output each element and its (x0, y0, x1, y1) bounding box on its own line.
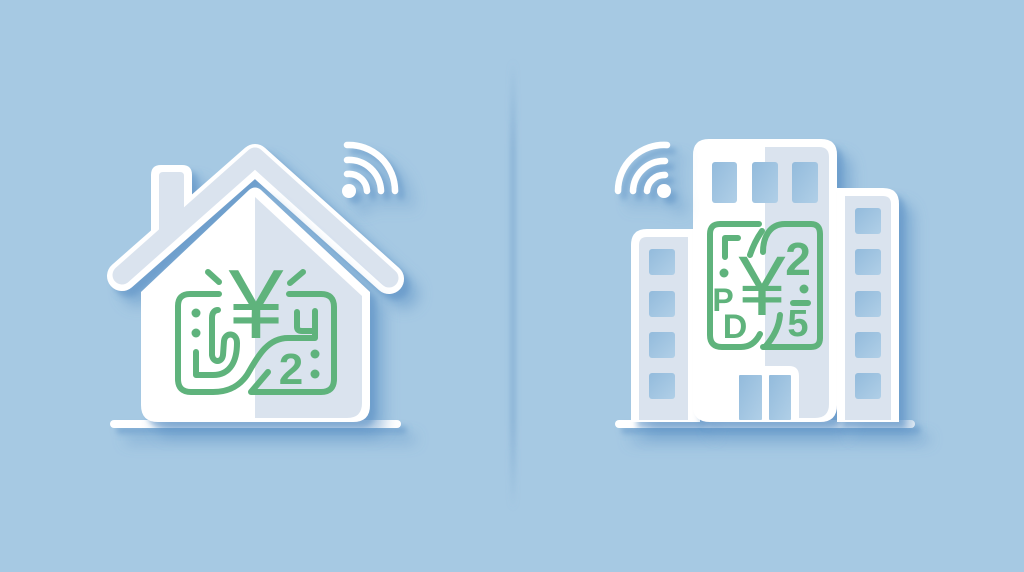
icon: house wifi signal (342, 145, 395, 198)
icon: building wifi signal (618, 145, 671, 198)
building yuan circuit emblem (710, 224, 820, 347)
letter D: D (723, 308, 747, 346)
yuan symbol: ¥ (738, 239, 786, 333)
digit 5: 5 (787, 303, 809, 345)
icon: house (110, 145, 401, 428)
icon: office buildings (615, 139, 915, 428)
house ground line (110, 420, 401, 428)
center divider (511, 60, 515, 510)
circuit lines (710, 224, 820, 347)
letter P: P (712, 282, 734, 318)
right tower (837, 188, 899, 422)
digit 2: 2 (279, 345, 303, 394)
circuit lines (178, 272, 334, 392)
door (732, 366, 799, 420)
circuit dots (720, 268, 808, 294)
digit 2: 2 (785, 233, 811, 285)
left tower (631, 229, 700, 422)
yuan symbol: ¥ (228, 249, 284, 359)
circuit dots (192, 308, 320, 378)
house yuan circuit emblem (178, 249, 334, 394)
house roof and chimney (122, 157, 389, 279)
center tower (693, 139, 837, 422)
building ground line (615, 420, 915, 428)
house body (141, 188, 370, 422)
